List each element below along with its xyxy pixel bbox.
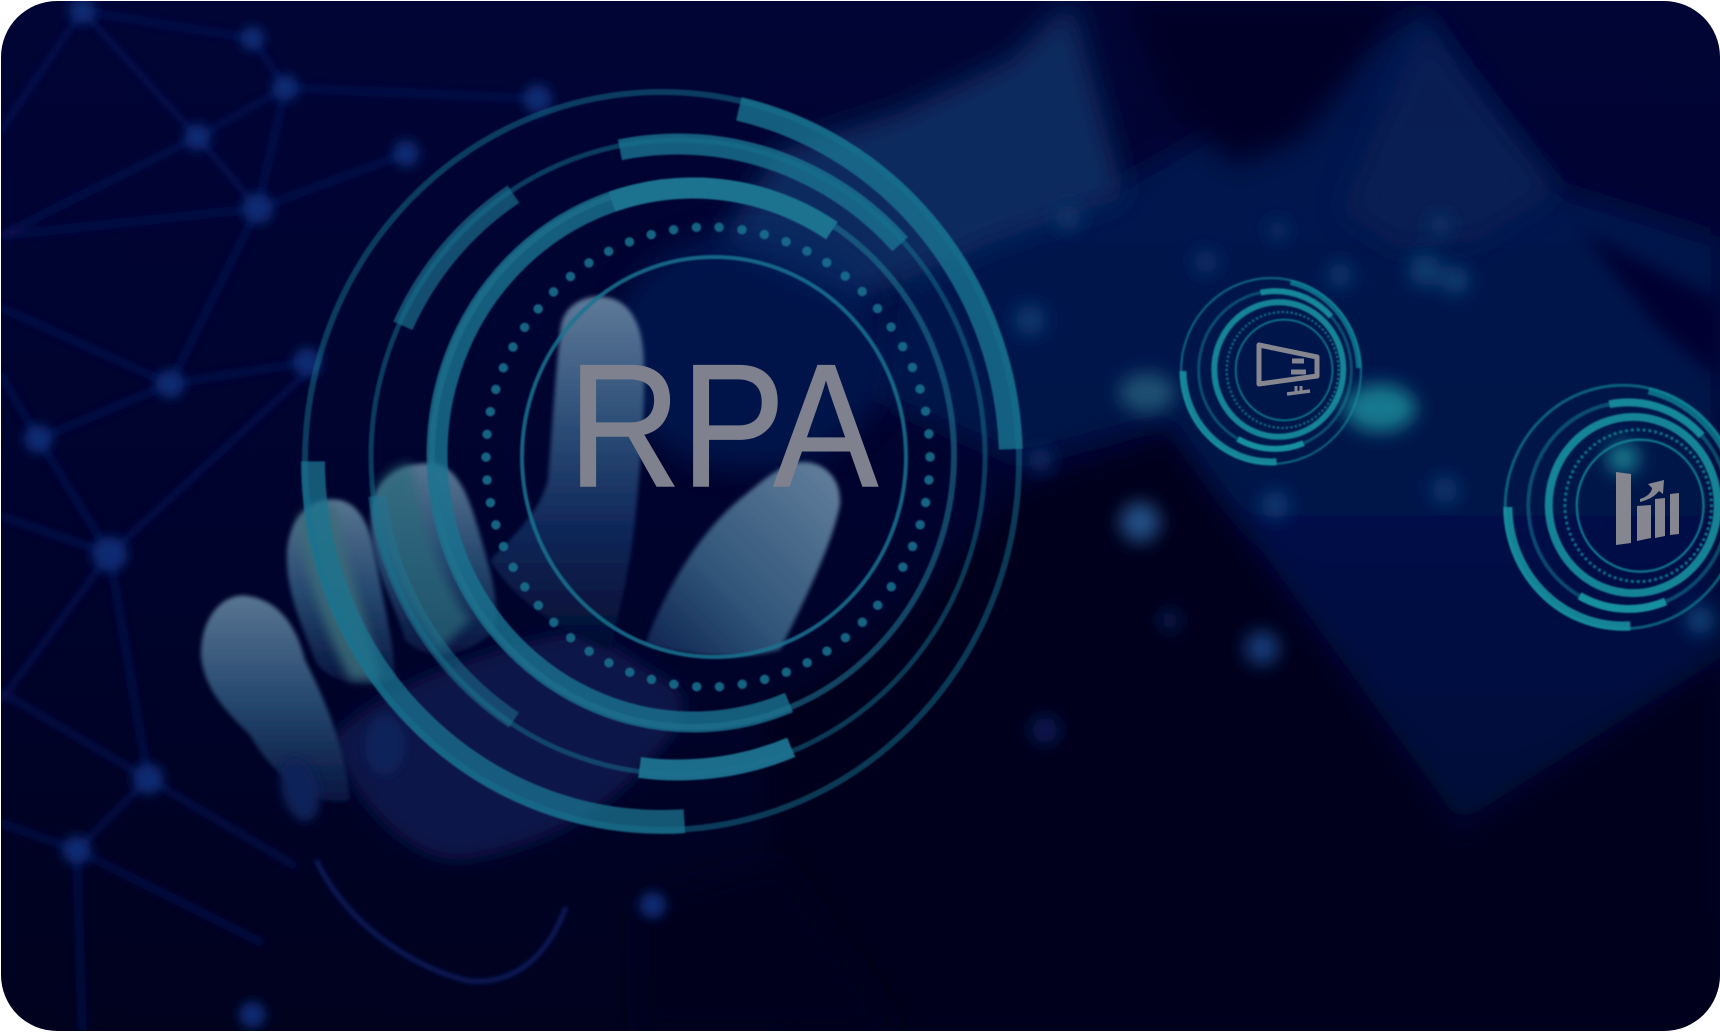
sleeve cuff: [316, 860, 566, 981]
thumb: [645, 462, 840, 656]
icon: bar chart: [1616, 472, 1679, 545]
middle finger: [371, 463, 496, 654]
network lines: [0, 11, 538, 1032]
small ring: monitor: [1181, 278, 1361, 464]
blurred right-side light nodes: [1015, 205, 1714, 743]
suit and shirt: [640, 0, 1720, 1032]
icon: monitor: [1259, 345, 1317, 394]
main concentric rings: [305, 92, 1019, 830]
ring band glow on middle finger: [375, 463, 470, 650]
ring band glow on ring finger: [297, 503, 382, 680]
hand: [201, 297, 840, 981]
small ring: bar chart: [1505, 385, 1720, 629]
pinky finger: [201, 596, 350, 802]
RPA label: RPA: [568, 329, 878, 524]
knuckle shapes: [276, 758, 324, 825]
network nodes: [24, 0, 666, 1028]
ring finger: [287, 499, 395, 684]
glow behind main ring: [610, 230, 890, 470]
index finger: [490, 297, 644, 650]
palm: [330, 630, 684, 860]
